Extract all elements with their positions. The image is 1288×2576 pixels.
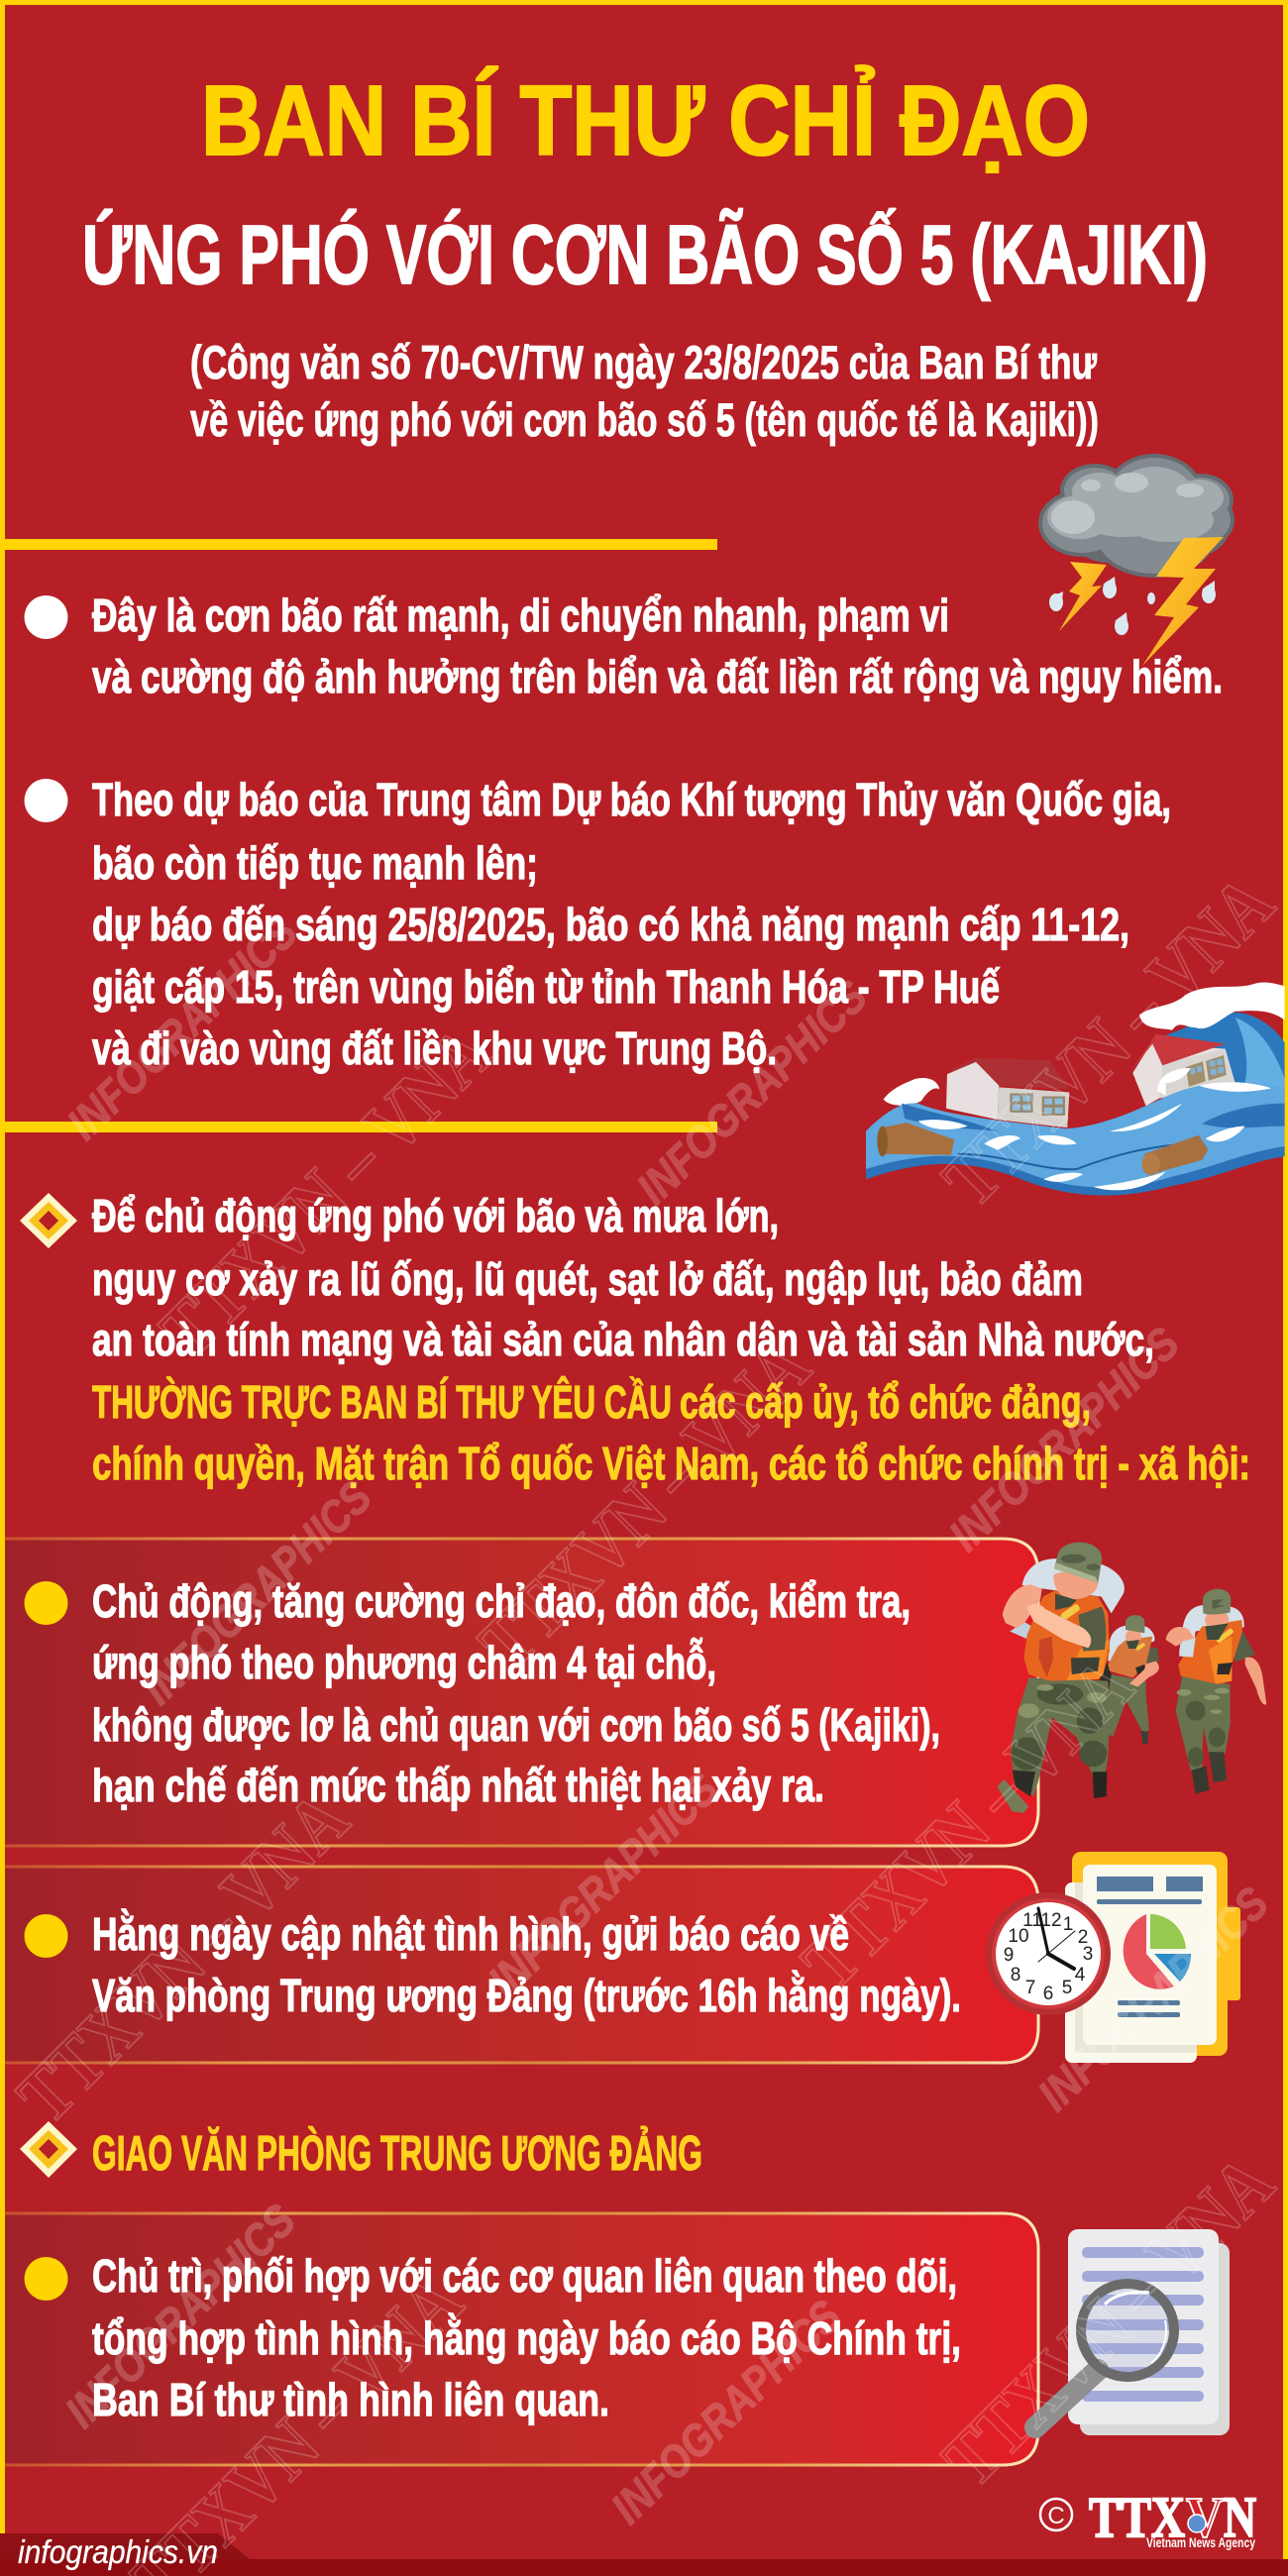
icon: diamond bullet (20, 2121, 77, 2178)
icon: wall clock (986, 1892, 1111, 2015)
text: intro lines (92, 1190, 1250, 1489)
panel: task 2 (5, 1867, 1038, 2063)
icon: wall clock: 1 (1063, 1914, 1073, 1935)
icon: large lightning bolt (1142, 537, 1224, 666)
watermarks: TTXVN – VNA (786, 1642, 1148, 2005)
text block: storm description (24, 590, 1223, 702)
panel: task 1 (5, 1539, 1038, 1846)
section heading: central party office (20, 2121, 702, 2181)
panel: task 3 (5, 2213, 1038, 2465)
watermarks: INFOGRAPHICS (601, 2290, 851, 2533)
right house (1129, 1034, 1235, 1106)
soldier: middle (1098, 1615, 1159, 1745)
footer: website: infographics.vn (18, 2533, 218, 2570)
icon: storm cloud with lightning (1038, 454, 1234, 666)
bullet (24, 2257, 67, 2301)
text: task 1 lines: hạn chế đến mức thấp nhất thiệt hại xảy ra. (92, 1760, 824, 1811)
illustration: soldiers carrying sandbags (998, 1543, 1266, 1813)
watermarks: INFOGRAPHICS (57, 906, 307, 1149)
logo: copyright mark and TTXVN (1040, 2485, 1256, 2550)
watermarks: INFOGRAPHICS (479, 1763, 728, 2006)
bullet (24, 1914, 67, 1958)
icon: wall clock: 3 (1083, 1944, 1093, 1965)
icon: wall clock: 11 (1022, 1910, 1042, 1931)
text block: forecast (24, 774, 1171, 1074)
icon: small lightning bolt (1059, 562, 1107, 631)
watermarks: TTXVN – VNA (1, 1775, 364, 2139)
divider: top yellow line (0, 539, 717, 550)
watermarks: TTXVN – VNA (463, 1323, 825, 1686)
water foam (918, 1082, 1271, 1190)
logo: copyright mark and TTXVN: V (1186, 2485, 1224, 2549)
icon: magnifier (1035, 2284, 1174, 2427)
icon: wall clock: 2 (1078, 1927, 1088, 1948)
text: task 3 lines: Ban Bí thư tình hình liên quan. (92, 2374, 609, 2425)
watermarks: INFOGRAPHICS (55, 2194, 305, 2437)
soldier: front (998, 1543, 1125, 1813)
text: intro lines: Để chủ động ứng phó với bão và mưa lớn, (92, 1190, 779, 1241)
illustration: report with pie chart (1065, 1852, 1240, 2063)
icon: wall clock: 10 (1008, 1926, 1029, 1947)
logo: copyright mark and TTXVN: TTX (1089, 2485, 1185, 2549)
text: task 3 lines (92, 2250, 961, 2425)
icon: wall clock: 4 (1075, 1965, 1086, 1986)
footer band (0, 2533, 1288, 2576)
water body (866, 1082, 1285, 1195)
section intro: request (20, 1190, 1250, 1489)
document reference (190, 336, 1099, 446)
text: task 1 lines (92, 1575, 940, 1811)
watermarks: INFOGRAPHICS (627, 970, 877, 1214)
text: task 2 lines: Hằng ngày cập nhật tình hình, gửi báo cáo về (92, 1908, 849, 1960)
icon: rain drops (1049, 577, 1216, 635)
icon: wall clock: 7 (1025, 1978, 1035, 1998)
bullet (24, 779, 67, 822)
text: task 2 lines (92, 1908, 961, 2021)
bullet (24, 1581, 67, 1625)
bullet (24, 595, 67, 639)
watermarks: INFOGRAPHICS (939, 1317, 1189, 1560)
left house (946, 1058, 1069, 1127)
icon: wall clock: 5 (1062, 1978, 1072, 1998)
text: intro lines: THƯỜNG TRỰC BAN BÍ THƯ YÊU CẦU (92, 1376, 672, 1428)
text: task 2 lines: Văn phòng Trung ương Đảng (trước 16h hằng ngày). (92, 1970, 961, 2021)
title: main heading: BAN BÍ THƯ CHỈ ĐẠO (201, 65, 1090, 176)
watermarks: INFOGRAPHICS (132, 1470, 381, 1714)
logo: copyright mark and TTXVN: C (1047, 2503, 1065, 2529)
text: task 1 lines: Chủ động, tăng cường chỉ đạo, đôn đốc, kiểm tra, (92, 1575, 911, 1627)
logs (877, 1123, 1208, 1175)
text: task 1 lines: ứng phó theo phương châm 4 tại chỗ, (92, 1637, 716, 1688)
illustration: flood with houses and logs (866, 983, 1285, 1196)
text: forecast lines: bão còn tiếp tục mạnh lên; (92, 837, 538, 889)
divider: second yellow line (0, 1122, 717, 1132)
text: forecast lines (92, 774, 1171, 1074)
text: line group 1 (92, 590, 1223, 702)
big wave (1152, 1013, 1285, 1099)
text: forecast lines: giật cấp 15, trên vùng biển từ tỉnh Thanh Hóa - TP Huế (92, 961, 1000, 1013)
icon: wall clock: 12 (1040, 1910, 1062, 1931)
text: forecast lines: và đi vào vùng đất liền khu vực Trung Bộ. (92, 1022, 777, 1074)
icon: wall clock: 9 (1004, 1945, 1014, 1966)
icon: wall clock: 8 (1011, 1965, 1020, 1986)
text: heading: GIAO VĂN PHÒNG TRUNG ƯƠNG ĐẢNG (92, 2126, 702, 2181)
text: task 1 lines: không được lơ là chủ quan với cơn bão số 5 (Kajiki), (92, 1699, 940, 1751)
icon: wall clock: 6 (1043, 1984, 1053, 2004)
icon: diamond bullet (20, 1193, 77, 1248)
pie chart (1124, 1914, 1191, 1989)
left foam (884, 1078, 939, 1106)
soldier: right (1166, 1589, 1266, 1794)
text: task 3 lines: tổng hợp tình hình, hằng ngày báo cáo Bộ Chính trị, (92, 2312, 961, 2364)
logo: copyright mark and TTXVN: N (1224, 2485, 1256, 2549)
watermarks: TTXVN – VNA (144, 1010, 506, 1373)
wave foam (1139, 983, 1285, 1030)
illustration: document with magnifier (1035, 2229, 1230, 2435)
text: intro lines: các cấp ủy, tổ chức đảng, (680, 1376, 1091, 1428)
text: line group 1: Đây là cơn bão rất mạnh, di chuyển nhanh, phạm vi (92, 590, 949, 641)
text: task 3 lines: Chủ trì, phối hợp với các cơ quan liên quan theo dõi, (92, 2250, 957, 2302)
watermarks (1, 859, 1288, 2576)
